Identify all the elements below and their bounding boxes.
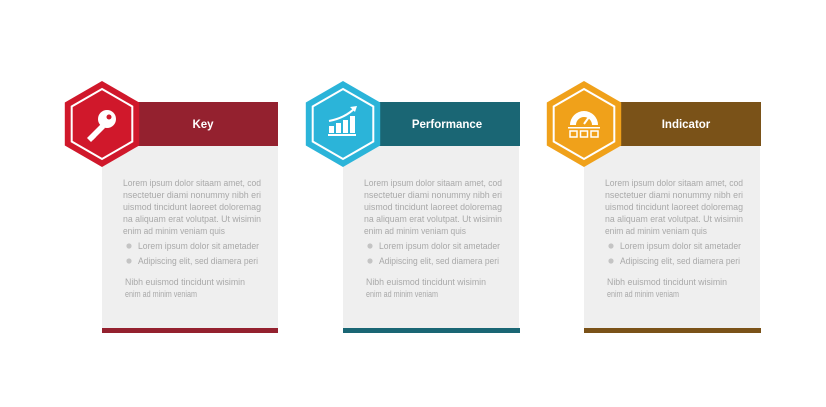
header bar: Performance (343, 102, 520, 146)
header bar: Indicator (584, 102, 761, 146)
card: Performance (306, 81, 520, 333)
card: Key (65, 81, 278, 333)
header bar: Performance: Performance (412, 119, 482, 131)
icon: key hexagon (65, 81, 139, 167)
header bar: Key: Key (192, 119, 214, 131)
icon: chart hexagon (306, 81, 380, 167)
icon: gauge hexagon (547, 81, 621, 167)
card: Indicator (547, 81, 761, 333)
header bar: Key (102, 102, 278, 146)
header bar: Indicator: Indicator (662, 119, 711, 131)
